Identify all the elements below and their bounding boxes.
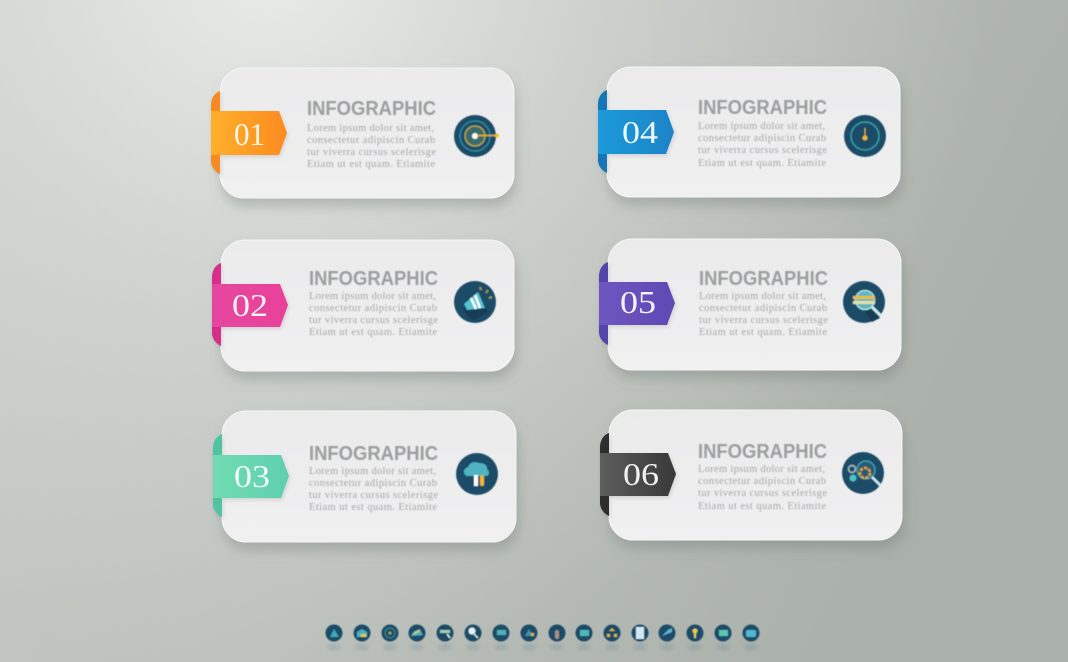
icon: megaphone <box>454 281 496 323</box>
text block 04: INFOGRAPHIC <box>698 97 827 119</box>
small icon 12 <box>632 624 648 642</box>
icon: target <box>454 115 499 157</box>
text block 06 <box>698 441 827 512</box>
small icon 10 <box>576 624 592 642</box>
text block 02: INFOGRAPHIC <box>309 268 438 290</box>
text block 04: consectetur adipiscin Curab <box>698 133 826 144</box>
ribbon 05 <box>599 262 675 345</box>
small icon 1 <box>326 624 342 642</box>
text block 03: Etiam ut est quam. Etiamite <box>309 502 437 513</box>
small icon 13 <box>658 624 676 642</box>
ribbon 06: 06 <box>623 456 659 492</box>
small icon 2 <box>354 624 370 642</box>
text block 01: Lorem ipsum dolor sit amet, <box>307 123 434 134</box>
text block 04: tur viverra cursus scelerisge <box>698 145 827 156</box>
icon: cloud <box>456 453 498 495</box>
panel: card 05 <box>599 239 901 370</box>
text block 06: tur viverra cursus scelerisge <box>698 488 827 499</box>
icon: gears and magnifier <box>842 452 884 494</box>
text block 03 <box>309 443 438 513</box>
small icon 9 <box>548 624 566 642</box>
text block 02: Lorem ipsum dolor sit amet, <box>309 291 436 302</box>
small icon 15 <box>714 624 732 642</box>
ribbon 05: 05 <box>620 284 656 320</box>
ribbon 03 <box>213 434 289 517</box>
text block 06: Etiam ut est quam. Etiamite <box>698 501 826 512</box>
small icon 6 <box>464 624 482 642</box>
small icon 11 <box>604 624 620 642</box>
ribbon 03: 03 <box>234 458 270 494</box>
icon: stopwatch <box>844 115 886 157</box>
text block 06: INFOGRAPHIC <box>698 441 827 463</box>
ribbon 04 <box>598 90 674 173</box>
text block 04: Etiam ut est quam. Etiamite <box>698 158 826 169</box>
text block 02: Etiam ut est quam. Etiamite <box>309 327 437 338</box>
small icon 3 <box>382 624 398 642</box>
ribbon 01 <box>211 91 287 174</box>
ribbon 02: 02 <box>232 287 268 323</box>
text block 05 <box>699 268 828 338</box>
text block 04 <box>698 97 827 169</box>
text block 06: Lorem ipsum dolor sit amet, <box>698 464 825 475</box>
text block 01 <box>307 98 436 170</box>
text block 05: consectetur adipiscin Curab <box>699 303 827 314</box>
text block 01: consectetur adipiscin Curab <box>307 135 435 146</box>
panel: card 04 <box>598 67 900 197</box>
small icon 8 <box>520 624 538 642</box>
ribbon 01: 01 <box>234 116 265 152</box>
text block 05: INFOGRAPHIC <box>699 268 828 290</box>
text block 03: Lorem ipsum dolor sit amet, <box>309 466 436 477</box>
text block 03: consectetur adipiscin Curab <box>309 478 437 489</box>
panel: card 03 <box>213 411 516 542</box>
text block 05: Lorem ipsum dolor sit amet, <box>699 291 826 302</box>
ribbon 02 <box>212 263 288 346</box>
text block 03: tur viverra cursus scelerisge <box>309 490 438 501</box>
text block 02 <box>309 268 438 338</box>
small icon 16 <box>742 624 760 642</box>
text block 02: consectetur adipiscin Curab <box>309 303 437 314</box>
small icon 7 <box>492 624 510 642</box>
text block 01: tur viverra cursus scelerisge <box>307 147 436 158</box>
icon row <box>326 624 760 650</box>
text block 02: tur viverra cursus scelerisge <box>309 315 438 326</box>
text block 06: consectetur adipiscin Curab <box>698 476 826 487</box>
text block 05: Etiam ut est quam. Etiamite <box>699 327 827 338</box>
panel: card 01 <box>211 68 514 198</box>
icon: magnifier on card <box>843 281 885 323</box>
ribbon 06 <box>600 433 676 516</box>
small icon 4 <box>408 624 426 642</box>
panel: card 06 <box>600 410 902 540</box>
small icon 14 <box>686 624 704 642</box>
text block 01: INFOGRAPHIC <box>307 98 436 120</box>
text block 03: INFOGRAPHIC <box>309 443 438 465</box>
icon reflections <box>327 644 758 650</box>
text block 01: Etiam ut est quam. Etiamite <box>307 159 435 170</box>
ribbon 04: 04 <box>622 114 658 150</box>
text block 05: tur viverra cursus scelerisge <box>699 315 828 326</box>
small icon 5 <box>436 624 454 642</box>
panel: card 02 <box>212 240 514 371</box>
text block 04: Lorem ipsum dolor sit amet, <box>698 121 825 132</box>
